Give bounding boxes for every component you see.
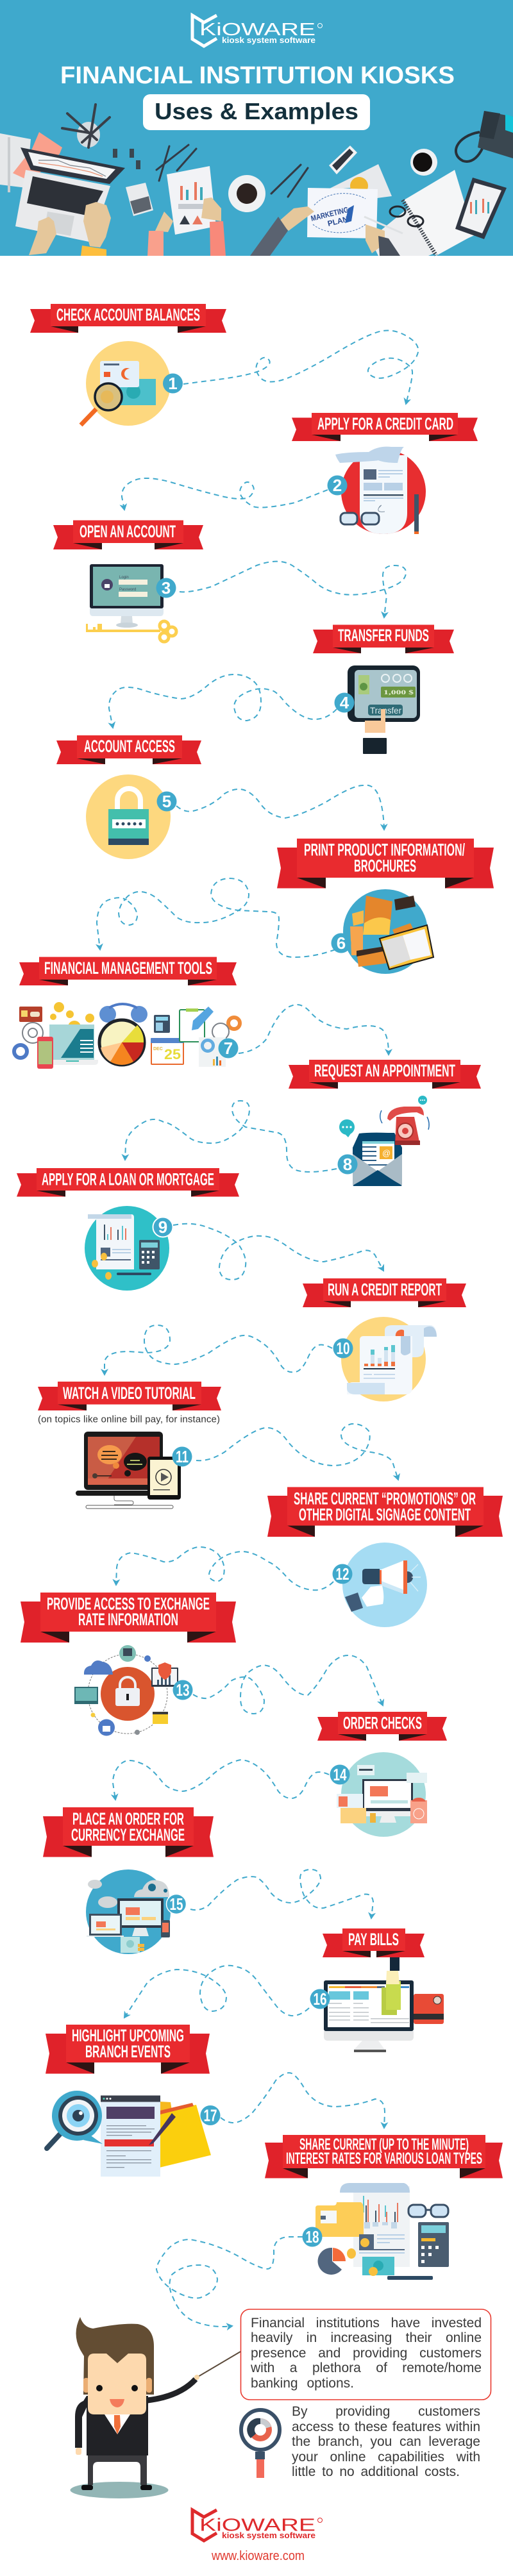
footer logo: KioWare red — [192, 2510, 322, 2541]
illustration: desk with laptop and hands: PLAN — [326, 214, 349, 228]
icon: gear magnifier — [241, 2410, 280, 2478]
icon: devices and cloud — [86, 1869, 171, 1954]
icon: credit report documents — [341, 1317, 437, 1401]
arrow: to step 11 — [105, 1325, 332, 1375]
logo: KioWare white — [192, 15, 322, 46]
banner: exchange rate information — [21, 1593, 236, 1643]
number 2: 2 — [333, 476, 342, 495]
icon: login monitor and key — [86, 564, 176, 642]
title: FINANCIAL INSTITUTION KIOSKS — [60, 62, 455, 89]
banner: pay bills: PAY BILLS — [348, 1930, 399, 1949]
banner: branch events: HIGHLIGHT UPCOMING — [72, 2026, 184, 2045]
banner: apply for a loan or mortgage — [17, 1168, 239, 1196]
icon: finance tools collage — [14, 1002, 240, 1069]
icon: phone and envelope: @ — [382, 1148, 391, 1158]
banner: request an appointment — [289, 1060, 481, 1089]
number 17: 17 — [204, 2105, 217, 2125]
arrow: to step 16 — [190, 1869, 373, 1918]
icon: login monitor and key: Password — [119, 588, 136, 592]
step 7: financial management tools — [14, 957, 389, 1069]
banner: currency exchange: CURRENCY EXCHANGE — [71, 1825, 185, 1844]
number 8: 8 — [343, 1155, 352, 1174]
step 8: request an appointment — [125, 1060, 481, 1186]
number 7: 7 — [224, 1039, 233, 1058]
arrow: to step 12 — [196, 1424, 398, 1480]
number 3: 3 — [162, 578, 171, 598]
number 15: 15 — [169, 1894, 183, 1914]
arrow: to step 6 — [176, 785, 384, 830]
number 6 — [331, 933, 351, 953]
closing text: leverage online capabilities: By providing customers — [292, 2404, 480, 2419]
icon: card, money and magnifier — [81, 341, 171, 426]
callout text: online presence: Financial institutions have invested — [251, 2316, 482, 2330]
arrow: to step 2 — [183, 330, 418, 404]
banner: financial management tools — [19, 957, 237, 985]
number 5 — [156, 791, 177, 812]
character: businessman with pointer — [71, 2317, 240, 2498]
banner: pay bills — [323, 1928, 425, 1957]
arrow: to step 9 — [125, 1101, 337, 1172]
number 6: 6 — [337, 933, 346, 953]
banner: currency exchange — [43, 1807, 214, 1857]
banner: interest rates — [265, 2135, 503, 2179]
banner: apply for a loan or mortgage: APPLY FOR A LOAN OR MORTGAGE — [42, 1169, 214, 1189]
number 16: 16 — [313, 1989, 327, 2009]
banner: apply for a credit card — [292, 413, 478, 441]
illustration: desk with laptop and hands: MARKETING — [310, 205, 349, 223]
arrow: to step 8 — [239, 1005, 389, 1055]
icon: brochures — [343, 889, 433, 974]
subtitle pill: Uses & Examples — [155, 98, 358, 124]
icon: security network — [74, 1645, 178, 1736]
icon: finance tools collage: 25 — [164, 1046, 181, 1062]
icon: transfer tablet and hand: Transfer — [370, 705, 401, 715]
arrow: to step 4 — [180, 562, 406, 617]
icon: charts, calculator and folder — [315, 2183, 449, 2280]
number 5: 5 — [162, 792, 171, 811]
banner: open an account: OPEN AN ACCOUNT — [80, 522, 176, 541]
number 7 — [218, 1039, 239, 1058]
banner: order checks — [317, 1712, 447, 1741]
step 17: highlight upcoming branch events — [46, 2025, 385, 2177]
step 14: order checks — [113, 1712, 447, 1837]
icon: megaphone — [342, 1543, 427, 1627]
step 4: transfer funds — [109, 624, 454, 754]
step 3: open an account — [53, 521, 406, 642]
arrow: to step 14 — [193, 1655, 383, 1714]
icon: transfer tablet and hand: 1,000 $ — [383, 689, 414, 696]
arrow: to step 13 — [116, 1547, 333, 1590]
banner: share current promotions — [267, 1487, 503, 1537]
number 18: 18 — [305, 2227, 319, 2246]
step 11: watch a video tutorial — [38, 1382, 398, 1509]
number 13: 13 — [176, 1680, 190, 1700]
number 12: 12 — [336, 1564, 349, 1584]
icon: loan report and calculator — [85, 1206, 169, 1291]
number 4 — [335, 692, 354, 713]
number 9: 9 — [158, 1217, 167, 1237]
icon: laptop and tablet video — [76, 1432, 181, 1509]
icon: transfer tablet and hand — [348, 665, 420, 754]
number 1 — [163, 373, 183, 394]
icon: login monitor and key: Login — [119, 576, 129, 580]
subtitle pill — [143, 94, 370, 130]
number 4: 4 — [340, 693, 349, 712]
logo: KioWare white: kiosk system software — [222, 35, 315, 45]
banner: order checks: ORDER CHECKS — [343, 1713, 422, 1732]
banner: transfer funds: TRANSFER FUNDS — [338, 626, 429, 645]
callout text: online presence: presence and providing customers — [251, 2346, 482, 2361]
arrow: to closing callout — [156, 2237, 303, 2327]
step 12: share current promotions — [116, 1487, 503, 1627]
callout text: online presence: with a plethora of remote/home — [251, 2361, 482, 2375]
banner: run a credit report — [303, 1278, 466, 1307]
arrow: to step 10 — [173, 1224, 383, 1280]
banner: financial management tools: FINANCIAL MANAGEMENT TOOLS — [44, 958, 212, 978]
banner: account access — [56, 735, 201, 764]
step 2: apply for a credit card — [122, 413, 478, 534]
icon: finance tools collage: DEC — [153, 1047, 163, 1051]
callout box outline — [241, 2309, 491, 2400]
closing text: leverage online capabilities — [292, 2404, 480, 2479]
banner: exchange rate information: RATE INFORMATION — [78, 1610, 178, 1629]
step 16: pay bills — [124, 1928, 444, 2052]
icon: document, eye magnifier and folder — [47, 2091, 211, 2177]
banner: print product information/brochures: BROCHURES — [354, 857, 416, 876]
banner: account access: ACCOUNT ACCESS — [84, 737, 175, 756]
header panel — [0, 0, 513, 256]
step 1: check account balances — [30, 304, 418, 426]
closing text: leverage online capabilities: your online capabilities with — [292, 2450, 480, 2464]
number 9 — [153, 1217, 173, 1237]
icon: phone and envelope — [339, 1096, 429, 1186]
number 8 — [337, 1154, 358, 1175]
closing text: leverage online capabilities: little to no additional costs. — [292, 2464, 460, 2479]
footer logo: KioWare red: KiOWARE — [199, 2514, 315, 2535]
banner: currency exchange: PLACE AN ORDER FOR — [72, 1809, 184, 1828]
closing text: leverage online capabilities: access to these features within — [292, 2420, 480, 2434]
banner: transfer funds — [313, 624, 454, 653]
number 10: 10 — [336, 1339, 350, 1358]
icon: online check ordering — [337, 1752, 427, 1837]
callout text: online presence: heavily in increasing their online — [251, 2330, 482, 2345]
banner: check account balances: CHECK ACCOUNT BALANCES — [56, 305, 200, 324]
arrow: to step 15 — [113, 1760, 329, 1800]
illustration: desk with laptop and hands — [0, 105, 513, 256]
arrow: to step 7 — [97, 878, 335, 957]
subtitle: topics note: (on topics like online bill pay, for instance) — [38, 1414, 220, 1425]
banner: print product information/brochures — [277, 839, 494, 889]
icon: bill payment monitor — [324, 1957, 444, 2052]
step 6: print product information — [97, 839, 494, 974]
step 13: provide access to exchange rate information — [21, 1593, 383, 1736]
number 11: 11 — [176, 1447, 189, 1466]
step 5: account access — [56, 735, 384, 859]
step 10: run a credit report — [105, 1278, 466, 1401]
step 18: share interest rates — [156, 2135, 503, 2327]
banner: exchange rate information: PROVIDE ACCESS TO EXCHANGE — [47, 1594, 210, 1613]
banner: watch a video tutorial: WATCH A VIDEO TUTORIAL — [63, 1384, 196, 1403]
footer logo: KioWare red: kiosk system software — [222, 2530, 315, 2540]
callout text: online presence — [251, 2316, 482, 2391]
banner: branch events: BRANCH EVENTS — [85, 2042, 171, 2061]
closing text: leverage online capabilities: the branch, you can leverage — [292, 2434, 480, 2449]
banner: open an account — [53, 521, 203, 549]
banner: check account balances — [30, 304, 226, 333]
number 2 — [327, 476, 348, 495]
callout text: online presence: banking options. — [251, 2376, 354, 2391]
step 9: apply for a loan or mortgage — [17, 1168, 383, 1291]
step 15: place an order for currency exchange — [43, 1807, 373, 1954]
arrow: to step 5 — [109, 674, 337, 728]
arrow: to step 3 — [122, 478, 328, 510]
number 3 — [156, 578, 176, 598]
arrow: to step 17 — [124, 1966, 309, 2018]
logo: KioWare white: KiOWARE — [199, 19, 315, 39]
icon: padlock — [86, 774, 171, 859]
footer url: www.kioware.com — [211, 2549, 305, 2563]
banner: branch events — [46, 2025, 210, 2073]
icon: signed application form — [335, 447, 426, 534]
number 1: 1 — [168, 374, 178, 393]
banner: watch a video tutorial — [38, 1382, 221, 1410]
arrow: to step 18 — [221, 2073, 385, 2128]
number 14: 14 — [333, 1765, 347, 1784]
